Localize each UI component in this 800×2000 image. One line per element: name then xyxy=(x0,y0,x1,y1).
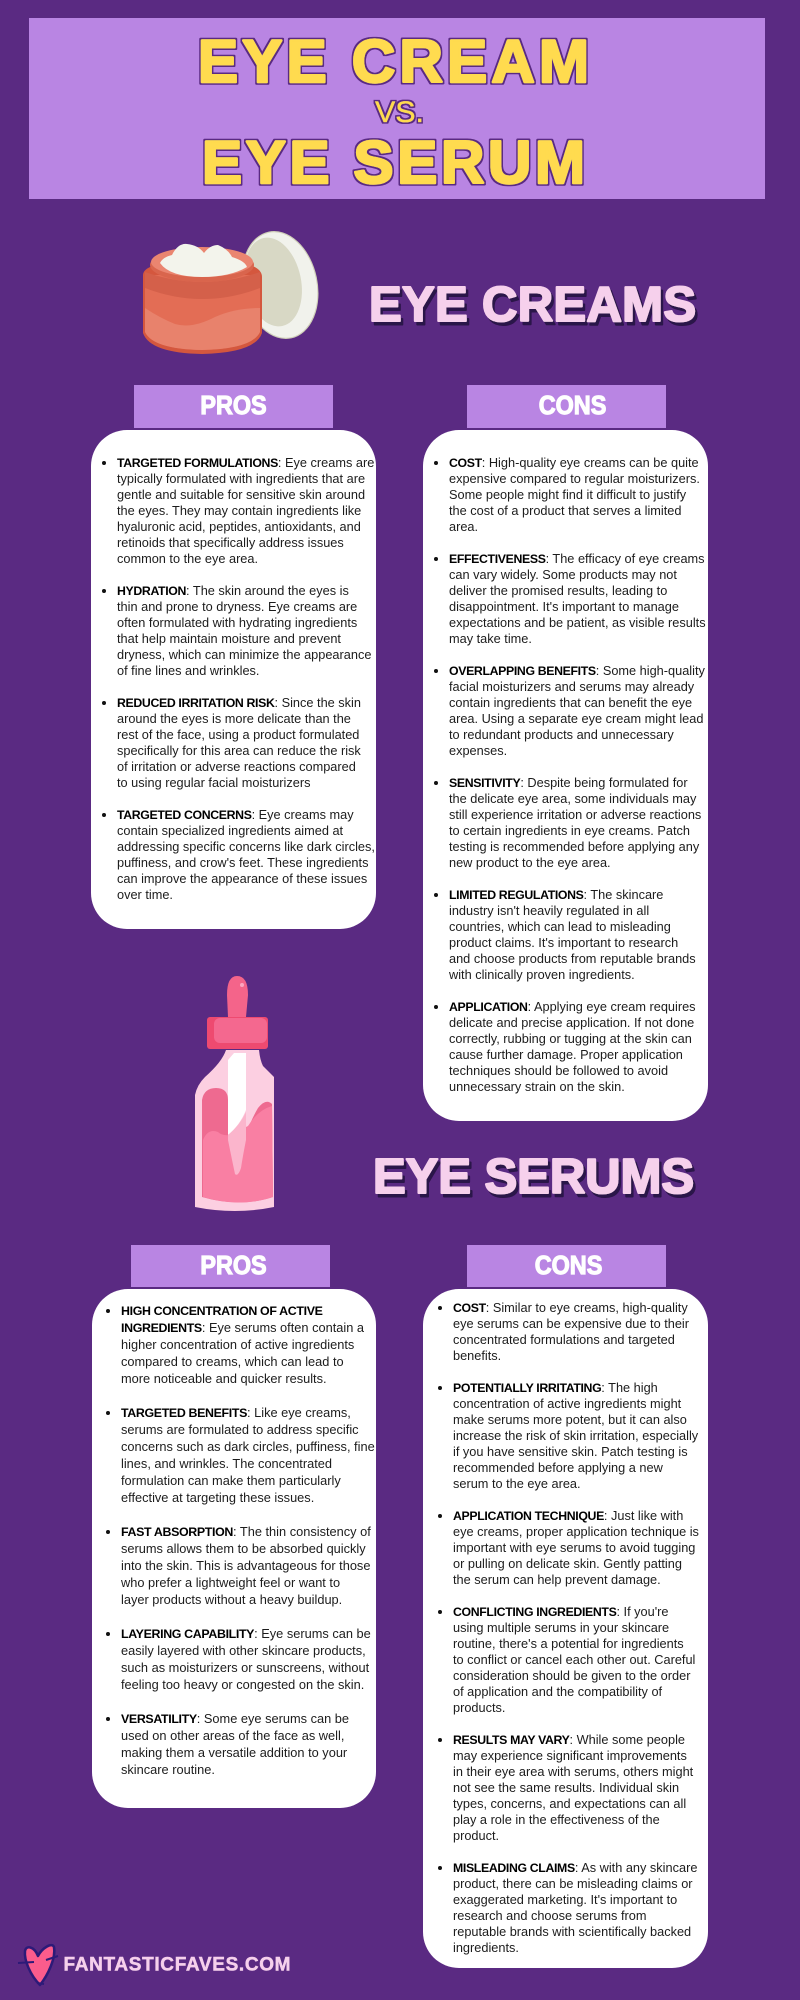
panel: eye serum pros: compared to creams, which can lead to xyxy=(121,1354,344,1369)
panel: eye cream pros: specifically for this area can reduce the risk xyxy=(117,743,361,758)
panel: eye serum pros: formulation can make them particularly xyxy=(121,1473,341,1488)
panel: eye serum cons: ingredients. xyxy=(453,1940,519,1955)
panel: eye cream cons: product claims. It's important to research xyxy=(449,935,678,950)
panel: eye cream cons: expensive compared to regular moisturizers. xyxy=(449,471,700,486)
panel: eye cream cons: the cost of a product that serves a limited xyxy=(449,503,681,518)
cons header: eye creams: CONS xyxy=(539,390,606,420)
panel: eye cream cons: and choose products from reputable brands xyxy=(449,951,696,966)
panel: eye serum cons xyxy=(423,1289,708,1968)
panel: eye cream pros: hyaluronic acid, peptides, antioxidants, and xyxy=(117,519,361,534)
panel: eye cream pros: the eyes. They may contain ingredients like xyxy=(117,503,361,518)
panel: eye serum cons: important with eye serums to avoid tugging xyxy=(453,1540,695,1555)
panel: eye cream pros: dryness, which can minimize the appearance xyxy=(117,647,371,662)
panel: eye cream cons: to certain ingredients in eye creams. Patch xyxy=(449,823,690,838)
panel: eye cream cons: SENSITIVITY: Despite being formulated for xyxy=(449,775,688,790)
panel: eye cream cons: LIMITED REGULATIONS: The skincare xyxy=(449,887,663,902)
panel: eye cream cons: delicate and precise application. If not done xyxy=(449,1015,694,1030)
panel: eye serum cons: not see the same results. Individual skin xyxy=(453,1780,679,1795)
panel: eye serum pros: layer products without a heavy buildup. xyxy=(121,1592,342,1607)
panel: eye serum cons: product, there can be misleading claims or xyxy=(453,1876,693,1891)
dropper highlight xyxy=(228,1053,246,1135)
panel: eye serum pros: serums are formulated to address specific xyxy=(121,1422,359,1437)
panel: eye cream cons: Some people might find it difficult to justify xyxy=(449,487,686,502)
panel: eye serum cons: types, concerns, and expectations can all xyxy=(453,1796,686,1811)
panel: eye serum cons: product. xyxy=(453,1828,499,1843)
panel: eye cream cons: still experience irritation or adverse reactions xyxy=(449,807,701,822)
panel: eye cream cons: contain ingredients that can benefit the eye xyxy=(449,695,692,710)
panel: eye cream cons: APPLICATION: Applying eye cream requires xyxy=(449,999,696,1014)
title text: EYE SERUM xyxy=(202,129,585,196)
title text xyxy=(198,28,589,196)
panel: eye cream cons: expenses. xyxy=(449,743,507,758)
panel: eye cream pros: TARGETED FORMULATIONS: Eye creams are xyxy=(117,455,374,470)
pros header: eye serums: PROS xyxy=(200,1250,267,1280)
panel: eye cream pros: HYDRATION: The skin around the eyes is xyxy=(117,583,349,598)
panel: eye serum cons: the serum can help prevent damage. xyxy=(453,1572,661,1587)
panel: eye serum pros: LAYERING CAPABILITY: Eye serums can be xyxy=(121,1626,371,1641)
pros header: eye creams xyxy=(134,385,333,428)
icon: cream jar xyxy=(143,231,318,354)
panel: eye cream cons: area. xyxy=(449,519,478,534)
panel: eye cream cons: testing is recommended before applying any xyxy=(449,839,699,854)
panel: eye cream pros: REDUCED IRRITATION RISK: Since the skin xyxy=(117,695,361,710)
panel: eye serum pros: easily layered with other skincare products, xyxy=(121,1643,366,1658)
panel: eye cream pros: of irritation or adverse reactions compared xyxy=(117,759,356,774)
panel: eye cream pros: to using regular facial moisturizers xyxy=(117,775,310,790)
panel: eye serum cons: routine, there's a potential for ingredients xyxy=(453,1636,684,1651)
panel: eye serum cons: exaggerated marketing. It's important to xyxy=(453,1892,677,1907)
icon: serum dropper bottle xyxy=(195,976,274,1211)
panel: eye cream pros: typically formulated with ingredients that are xyxy=(117,471,365,486)
panel: eye serum pros: FAST ABSORPTION: The thin consistency of xyxy=(121,1524,371,1539)
panel: eye serum cons: consideration should be given to the order xyxy=(453,1668,690,1683)
panel: eye cream pros: that help maintain moisture and prevent xyxy=(117,631,341,646)
panel: eye serum pros: skincare routine. xyxy=(121,1762,215,1777)
panel: eye cream pros: puffiness, and crow's feet. These ingredients xyxy=(117,855,368,870)
panel: eye cream pros: retinoids that specifically address issues xyxy=(117,535,344,550)
liquid xyxy=(202,1088,273,1202)
footer site name: FANTASTICFAVES.COM xyxy=(64,1954,290,1976)
panel: eye serum pros: into the skin. This is advantageous for those xyxy=(121,1558,370,1573)
panel: eye cream cons: COST: High-quality eye creams can be quite xyxy=(449,455,699,470)
panel: eye cream cons: expectations and be patient, as visible results xyxy=(449,615,706,630)
panel: eye serum cons: recommended before applying a new xyxy=(453,1460,663,1475)
panel: eye cream pros: gentle and suitable for sensitive skin around xyxy=(117,487,365,502)
panel: eye serum cons: APPLICATION TECHNIQUE: Just like with xyxy=(453,1508,683,1523)
panel: eye cream cons: OVERLAPPING BENEFITS: Some high-quality xyxy=(449,663,705,678)
title text: EYE CREAM xyxy=(198,28,589,95)
panel: eye cream cons: can vary widely. Some products may not xyxy=(449,567,677,582)
cons header: eye serums: CONS xyxy=(535,1250,602,1280)
panel: eye serum pros: lines, and wrinkles. The concentrated xyxy=(121,1456,332,1471)
panel: eye serum pros: more noticeable and quicker results. xyxy=(121,1371,327,1386)
panel: eye serum cons: benefits. xyxy=(453,1348,501,1363)
panel: eye cream cons: to redundant products and unnecessary xyxy=(449,727,674,742)
panel: eye serum cons: eye serums can be expensive due to their xyxy=(453,1316,689,1331)
pros header: eye creams: PROS xyxy=(200,390,267,420)
title text: VS. xyxy=(375,96,424,129)
panel: eye cream cons: deliver the promised results, leading to xyxy=(449,583,667,598)
panel: eye serum cons: CONFLICTING INGREDIENTS: If you're xyxy=(453,1604,668,1619)
panel: eye serum pros: used on other areas of the face as well, xyxy=(121,1728,344,1743)
panel: eye serum cons: concentrated formulations and targeted xyxy=(453,1332,675,1347)
panel: eye cream pros xyxy=(91,430,376,929)
cons header: eye creams xyxy=(467,385,666,428)
cons header: eye serums xyxy=(467,1245,666,1287)
panel: eye cream cons: may take time. xyxy=(449,631,532,646)
panel: eye cream pros: can improve the appearance of these issues xyxy=(117,871,367,886)
panel: eye cream cons xyxy=(423,430,708,1121)
panel: eye serum pros: such as moisturizers or sunscreens, without xyxy=(121,1660,369,1675)
panel: eye serum pros: serums allows them to be absorbed quickly xyxy=(121,1541,366,1556)
panel: eye cream pros: TARGETED CONCERNS: Eye creams may xyxy=(117,807,354,822)
panel: eye serum cons: play a role in the effectiveness of the xyxy=(453,1812,660,1827)
panel: eye serum cons: reputable brands with scientifically backed xyxy=(453,1924,691,1939)
panel: eye cream cons: area. Using a separate eye cream might lead xyxy=(449,711,703,726)
panel: eye cream cons: cause further damage. Proper application xyxy=(449,1047,683,1062)
panel: eye serum cons: COST: Similar to eye creams, high-quality xyxy=(453,1300,688,1315)
panel: eye serum cons: RESULTS MAY VARY: While some people xyxy=(453,1732,685,1747)
panel: eye serum cons: of application and the compatibility of xyxy=(453,1684,662,1699)
panel: eye cream pros: rest of the face, using a product formulated xyxy=(117,727,359,742)
panel: eye serum pros: who prefer a lightweight feel or want to xyxy=(121,1575,340,1590)
panel: eye cream cons: EFFECTIVENESS: The efficacy of eye creams xyxy=(449,551,705,566)
panel: eye cream cons: correctly, rubbing or tugging at the skin can xyxy=(449,1031,692,1046)
panel: eye cream cons: industry isn't heavily regulated in all xyxy=(449,903,649,918)
panel: eye cream pros: around the eyes is more delicate than the xyxy=(117,711,351,726)
panel: eye serum pros: INGREDIENTS: Eye serums often contain a xyxy=(121,1320,364,1335)
lid xyxy=(233,224,327,346)
panel: eye serum cons: serum to the eye area. xyxy=(453,1476,581,1491)
panel: eye serum pros: higher concentration of active ingredients xyxy=(121,1337,354,1352)
panel: eye serum pros: making them a versatile addition to your xyxy=(121,1745,347,1760)
panel: eye cream pros: common to the eye area. xyxy=(117,551,258,566)
panel: eye serum cons: POTENTIALLY IRRITATING: The high xyxy=(453,1380,658,1395)
panel: eye serum cons: may experience significant improvements xyxy=(453,1748,687,1763)
panel: eye serum pros: concerns such as dark circles, puffiness, fine xyxy=(121,1439,375,1454)
panel: eye serum cons: to conflict or cancel each other out. Careful xyxy=(453,1652,695,1667)
panel: eye serum cons: or pulling on delicate skin. Gently patting xyxy=(453,1556,682,1571)
dropper bulb xyxy=(227,976,248,1017)
title banner xyxy=(29,18,765,199)
panel: eye serum pros: VERSATILITY: Some eye serums can be xyxy=(121,1711,349,1726)
panel: eye serum cons: increase the risk of skin irritation, especially xyxy=(453,1428,698,1443)
panel: eye serum pros: feeling too heavy or congested on the skin. xyxy=(121,1677,364,1692)
panel: eye serum cons: using multiple serums in your skincare xyxy=(453,1620,669,1635)
panel: eye cream cons: countries, which can lead to misleading xyxy=(449,919,671,934)
panel: eye serum cons: MISLEADING CLAIMS: As with any skincare xyxy=(453,1860,697,1875)
panel: eye cream pros: over time. xyxy=(117,887,173,902)
panel: eye serum cons: make serums more potent, but it can also xyxy=(453,1412,687,1427)
panel: eye serum pros xyxy=(92,1289,376,1808)
panel: eye cream cons: unnecessary strain on the skin. xyxy=(449,1079,625,1094)
panel: eye serum cons: research and choose serums from xyxy=(453,1908,646,1923)
panel: eye serum pros: HIGH CONCENTRATION OF ACTIVE xyxy=(121,1304,323,1318)
panel: eye serum cons: if you have sensitive skin. Patch testing is xyxy=(453,1444,688,1459)
panel: eye serum pros: effective at targeting these issues. xyxy=(121,1490,314,1505)
panel: eye cream cons: new product to the eye area. xyxy=(449,855,611,870)
heading: eye creams: EYE CREAMS xyxy=(369,278,696,332)
panel: eye cream pros: addressing specific concerns like dark circles, xyxy=(117,839,375,854)
jar body xyxy=(143,247,262,354)
bottle glass xyxy=(195,1050,274,1211)
panel: eye serum cons: products. xyxy=(453,1700,505,1715)
cap xyxy=(207,1017,268,1049)
panel: eye cream pros: often formulated with hydrating ingredients xyxy=(117,615,357,630)
panel: eye serum pros: TARGETED BENEFITS: Like eye creams, xyxy=(121,1405,351,1420)
panel: eye cream cons: the delicate eye area, some individuals may xyxy=(449,791,696,806)
icon: heart logo xyxy=(18,1944,58,1986)
panel: eye cream pros: thin and prone to dryness. Eye creams are xyxy=(117,599,357,614)
panel: eye serum cons: eye creams, proper application technique is xyxy=(453,1524,699,1539)
panel: eye serum cons: concentration of active ingredients might xyxy=(453,1396,681,1411)
panel: eye cream cons: disappointment. It's important to manage xyxy=(449,599,679,614)
panel: eye cream cons: techniques should be followed to avoid xyxy=(449,1063,668,1078)
cream xyxy=(160,244,247,277)
panel: eye cream cons: with clinically proven ingredients. xyxy=(449,967,635,982)
heading: eye serums: EYE SERUMS xyxy=(373,1150,694,1204)
panel: eye cream pros: contain specialized ingredients aimed at xyxy=(117,823,343,838)
pros header: eye serums xyxy=(131,1245,330,1287)
panel: eye serum cons: in their eye area with serums, others might xyxy=(453,1764,693,1779)
panel: eye cream pros: of fine lines and wrinkles. xyxy=(117,663,259,678)
panel: eye cream cons: facial moisturizers and serums may already xyxy=(449,679,694,694)
